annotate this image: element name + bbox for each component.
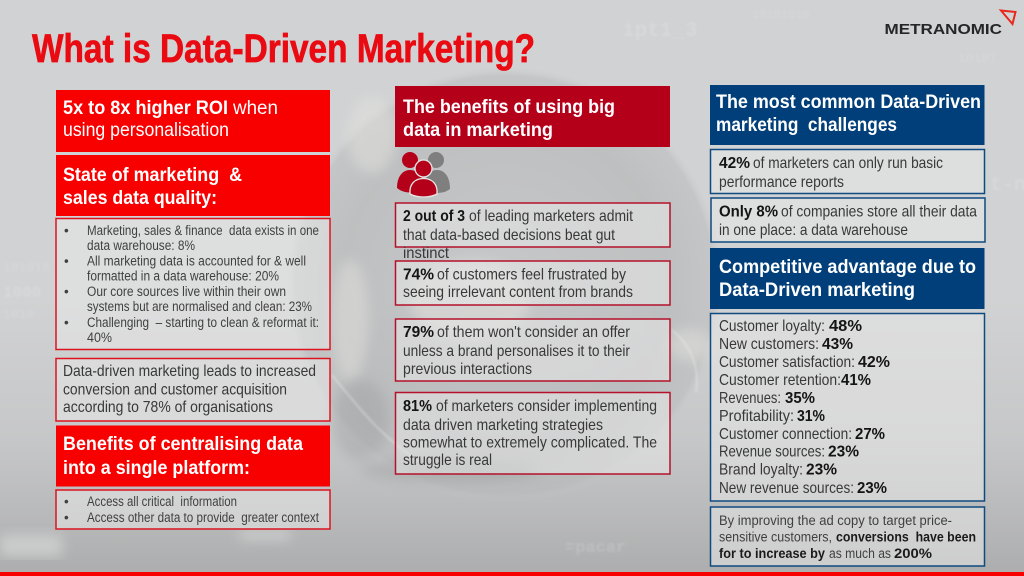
list: competitive advantage figures: New customers: [719, 336, 819, 353]
stat: 2 out of 3: 2 out of 3 [403, 208, 465, 225]
header: state of data quality: sales data quality: [63, 187, 217, 209]
background: globe and data texture: 10101010 [752, 8, 810, 22]
header: higher ROI [56, 90, 330, 152]
header: higher ROI: using personalisation [63, 119, 229, 141]
stat: 81%: somewhat to extremely complicated. The [403, 434, 657, 452]
list: competitive advantage figures: Customer loyalty: [719, 318, 825, 335]
list: competitive advantage figures: Revenues: [719, 390, 781, 407]
list: centralising benefits: • [64, 494, 69, 509]
list: data quality [56, 218, 330, 350]
header: higher ROI: 5x to 8x higher ROI [63, 97, 228, 119]
header: benefits of big data: The benefits of using big [403, 96, 615, 118]
background: globe and data texture: 101010 [3, 260, 50, 275]
header: state of data quality [56, 155, 330, 216]
header: state of data quality: State of marketing & [63, 164, 242, 186]
background: globe and data texture: 1000 [3, 284, 41, 302]
list: data quality: Our core sources live within their own [87, 284, 286, 299]
list: competitive advantage figures: New revenue sources: [719, 480, 854, 497]
panel: middle column [395, 86, 670, 474]
header: benefits of centralising: Benefits of centralising data [63, 433, 303, 455]
stat: 79%: 79% [403, 324, 434, 341]
list: data quality: formatted in a data warehouse: 20% [87, 268, 279, 284]
callout: ad copy conversions: sensitive customers, [719, 530, 832, 544]
callout: ad copy conversions: By improving the ad copy to target price- [719, 513, 952, 528]
list: data quality: systems but are normalised and clean: 23% [87, 299, 312, 314]
stat: 81%: 81% [403, 398, 432, 415]
stat: only 8%: Only 8% [719, 204, 778, 220]
list: competitive advantage figures: 48% [829, 318, 862, 335]
stat: 74% [396, 261, 670, 305]
header: benefits of centralising [56, 426, 330, 486]
list: competitive advantage figures: Customer connection: [719, 426, 852, 443]
background: globe and data texture: 10101 [958, 51, 997, 66]
stat: 74%: of customers feel frustrated by [437, 266, 626, 284]
stat: only 8%: in one place: a data warehouse [719, 222, 908, 239]
list: data quality: All marketing data is accounted for & well [87, 254, 306, 268]
list: competitive advantage figures: Profitability: [719, 408, 794, 425]
callout: ad copy conversions: 200% [894, 546, 932, 561]
stat: only 8% [711, 198, 985, 242]
list: competitive advantage figures: 42% [858, 354, 890, 371]
header: challenges: The most common Data-Driven [716, 91, 981, 113]
stat: 2 out of 3 [396, 203, 670, 262]
stat: 2 out of 3: of leading marketers admit [469, 208, 633, 225]
callout: ad copy conversions: as much as [829, 546, 891, 561]
header: competitive advantage [710, 248, 984, 309]
callout: ad copy conversions: conversions have been [836, 530, 976, 544]
text block: conversion: Data-driven marketing leads to increased [63, 363, 316, 380]
panel: left column [56, 90, 330, 529]
list: centralising benefits [56, 490, 330, 529]
list: competitive advantage figures: Revenue sources: [719, 444, 825, 460]
logo: Metranomic: METRANOMIC [884, 21, 1002, 38]
list: competitive advantage figures: 23% [806, 462, 837, 478]
header: higher ROI: when [232, 97, 278, 119]
list: data quality: data warehouse: 8% [87, 238, 195, 253]
header: challenges [710, 85, 984, 145]
list: competitive advantage figures: 23% [857, 480, 887, 497]
list: competitive advantage figures: Brand loyalty: [719, 462, 803, 478]
background: globe and data texture: ipt1_3 [622, 20, 698, 43]
stat: 79%: of them won't consider an offer [437, 324, 631, 341]
callout: ad copy conversions [710, 507, 984, 566]
stat: only 8%: of companies store all their data [781, 204, 977, 220]
text block: conversion [56, 358, 330, 421]
stat: 2 out of 3: that data-based decisions beat gut [403, 227, 615, 244]
list: competitive advantage figures: 31% [797, 408, 825, 425]
list: data quality: 40% [87, 330, 112, 345]
list: data quality: • [64, 223, 69, 238]
bottom accent bar [0, 572, 1024, 576]
stat: 42%: of marketers can only run basic [753, 155, 943, 172]
title: What is Data-Driven Marketing? [32, 27, 535, 71]
list: competitive advantage figures: Customer retention: [719, 372, 841, 389]
list: competitive advantage figures: 27% [855, 426, 885, 443]
callout: ad copy conversions: for to increase by [719, 546, 825, 561]
list: centralising benefits: • [64, 510, 69, 525]
list: data quality: • [64, 254, 69, 268]
list: centralising benefits: Access other data to provide greater context [87, 510, 319, 525]
stat: 2 out of 3: instinct [403, 245, 450, 262]
background: globe and data texture: =pacar [565, 539, 626, 558]
list: data quality: Challenging – starting to clean & reformat it: [87, 315, 319, 330]
header: benefits of centralising: into a single platform: [63, 457, 250, 479]
background: globe and data texture: 1010 [3, 307, 34, 322]
icon: group of people [397, 152, 450, 197]
text block: conversion: according to 78% of organisations [63, 399, 273, 416]
stat: 79% [396, 319, 670, 381]
stat: 42%: 42% [719, 155, 750, 172]
stat: 74%: seeing irrelevant content from brands [403, 284, 633, 301]
list: data quality: Marketing, sales & finance data exists in one [87, 223, 319, 238]
list: data quality: • [64, 284, 69, 299]
stat: 42% [710, 150, 984, 194]
stat: 79%: previous interactions [403, 361, 532, 378]
stat: 81%: data driven marketing strategies [403, 417, 603, 434]
list: competitive advantage figures: Customer satisfaction: [719, 354, 855, 371]
list: data quality: • [64, 315, 69, 330]
stat: 81%: struggle is real [403, 452, 492, 469]
header: competitive advantage: Competitive advantage due to [719, 256, 976, 278]
text block: conversion: conversion and customer acquisition [63, 382, 287, 398]
list: competitive advantage figures: 43% [822, 336, 853, 353]
stat: 42%: performance reports [719, 174, 844, 191]
header: competitive advantage: Data-Driven marketing [719, 279, 915, 301]
list: competitive advantage figures [710, 314, 984, 501]
stat: 81%: of marketers consider implementing [436, 398, 657, 415]
logo: Metranomic [884, 10, 1016, 38]
list: competitive advantage figures: 23% [828, 444, 859, 460]
stat: 81% [396, 392, 670, 474]
header: challenges: marketing challenges [716, 114, 897, 136]
list: competitive advantage figures: 41% [841, 372, 871, 389]
stat: 74%: 74% [403, 266, 434, 284]
stat: 79%: unless a brand personalises it to their [403, 343, 631, 360]
panel: right column [710, 85, 985, 566]
list: centralising benefits: Access all critical information [87, 494, 237, 509]
header: benefits of big data [395, 86, 670, 147]
header: benefits of big data: data in marketing [403, 119, 553, 141]
list: competitive advantage figures: 35% [785, 390, 815, 407]
